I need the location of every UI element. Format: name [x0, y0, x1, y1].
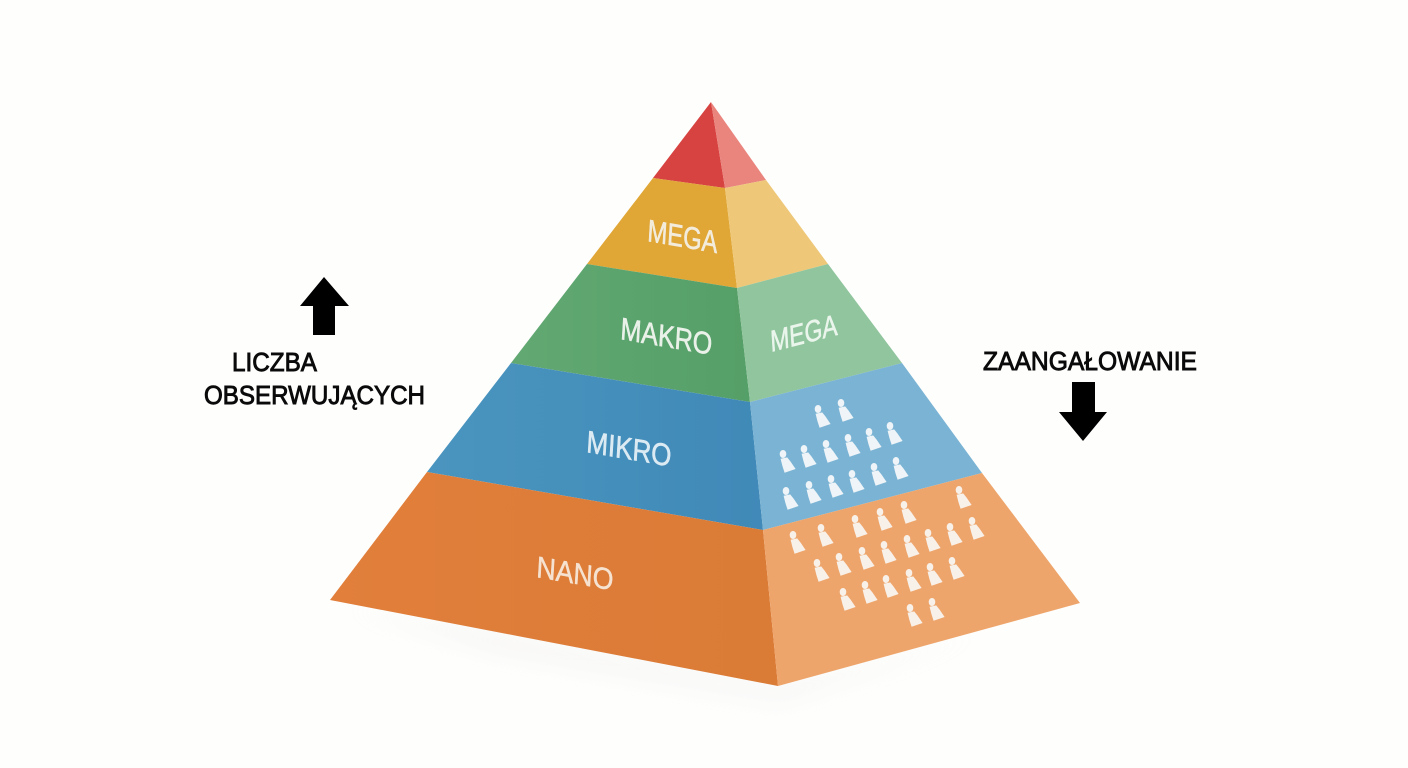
- label: ZAANGAŁOWANIE: ZAANGAŁOWANIE: [983, 346, 1197, 376]
- pyramid shadow: [345, 606, 1075, 700]
- tier: makro (green): [511, 264, 902, 402]
- label: MEGA right face: MEGA: [769, 309, 838, 359]
- pyramid: [330, 102, 1080, 686]
- label: MIKRO: MIKRO: [586, 424, 672, 474]
- tier: nano (orange): [330, 472, 1080, 686]
- tier: mikro (blue): [427, 363, 982, 530]
- tier: mega (yellow): [587, 178, 828, 288]
- label: MEGA: MEGA: [647, 213, 719, 260]
- people icons: nano: [790, 486, 985, 627]
- label: LICZBA OBSERWUJĄCYCH: OBSERWUJĄCYCH: [204, 380, 425, 410]
- tier: top (red): [653, 102, 766, 188]
- label: LICZBA OBSERWUJĄCYCH: LICZBA: [232, 347, 318, 377]
- label: LICZBA OBSERWUJĄCYCH: [204, 347, 425, 410]
- arrow: down: [1059, 382, 1107, 441]
- people icons: mikro: [780, 399, 909, 510]
- arrow: up: [300, 277, 349, 335]
- label: NANO: NANO: [536, 551, 614, 597]
- label: MAKRO: MAKRO: [620, 311, 713, 362]
